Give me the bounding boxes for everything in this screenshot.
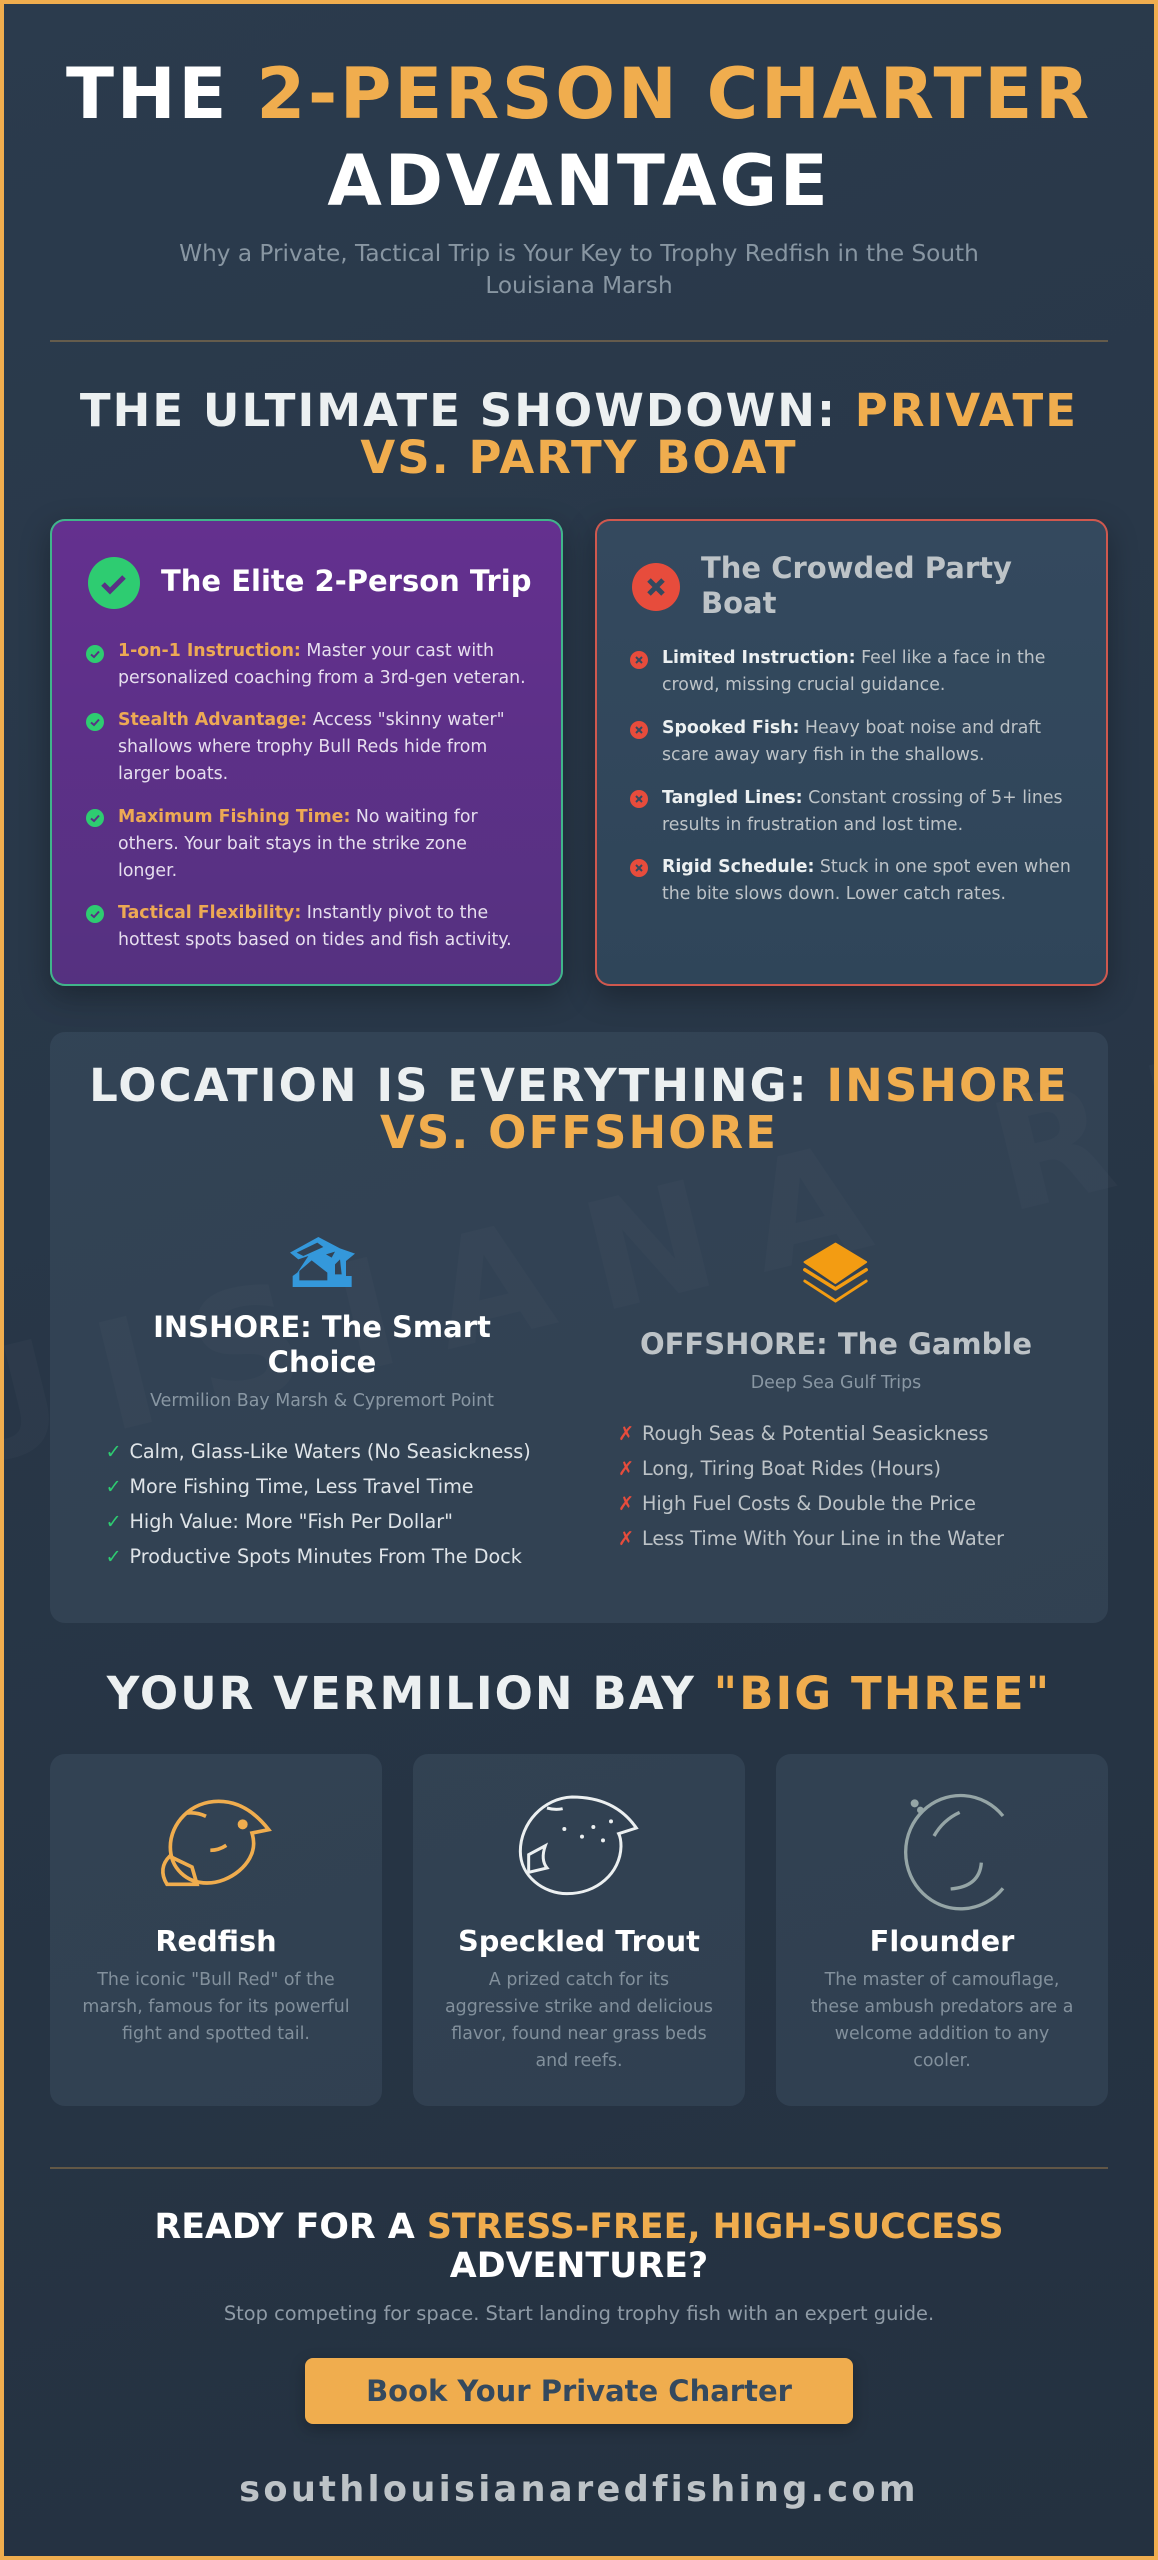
species description — [445, 1970, 713, 2071]
panel: location — [50, 1032, 1108, 1623]
list: inshore benefits: ✓ — [106, 1510, 122, 1533]
species description: cooler. — [913, 2051, 971, 2071]
heading: inshore: INSHORE: The Smart — [153, 1310, 491, 1344]
card: flounder — [776, 1754, 1108, 2106]
list: offshore drawbacks: Rough Seas & Potential Seasickness — [642, 1422, 989, 1445]
heading: location is everything: LOCATION IS EVERYTHING: INSHORE — [89, 1059, 1069, 1112]
list item: instruction — [86, 641, 526, 688]
species description: fight and spotted tail. — [122, 2024, 310, 2044]
list item: tangled lines — [630, 788, 1063, 835]
heading: location is everything: VS. OFFSHORE — [380, 1106, 778, 1159]
heading: ultimate showdown — [80, 384, 1078, 484]
list item: tangled lines: results in frustration and lost time. — [662, 815, 963, 835]
list item: limited instruction: Limited Instruction: Feel like a face in the — [662, 648, 1045, 668]
species description — [811, 1970, 1073, 2071]
species name: Speckled Trout — [458, 1924, 700, 1958]
list: offshore drawbacks: ✗ — [618, 1492, 634, 1515]
panel: elite 2-person trip — [50, 519, 563, 986]
button: book charter: Book Your Private Charter — [366, 2374, 792, 2408]
list: inshore benefits: ✓ — [106, 1440, 122, 1463]
heading: ultimate showdown: THE ULTIMATE SHOWDOWN: PRIVATE — [80, 384, 1078, 437]
list: offshore drawbacks: ✗ — [618, 1422, 634, 1445]
card: speckled trout — [413, 1754, 745, 2106]
list: offshore drawbacks: Less Time With Your Line in the Water — [642, 1527, 1004, 1550]
list item: flexibility — [86, 903, 512, 950]
species name: Redfish — [155, 1924, 277, 1958]
column: inshore — [106, 1237, 531, 1568]
list item: spooked fish: scare away wary fish in the shallows. — [662, 745, 984, 765]
heading: inshore: Choice — [268, 1345, 376, 1379]
subtitle — [179, 240, 979, 299]
species description: welcome addition to any — [835, 2024, 1049, 2044]
list item: limited instruction — [630, 648, 1045, 695]
species description: The master of camouflage, — [825, 1970, 1059, 1990]
list item: spooked fish — [630, 718, 1041, 765]
list item: stealth: Stealth Advantage: Access "skinny water" — [118, 710, 505, 730]
panel: crowded party boat — [595, 519, 1108, 986]
heading: location is everything — [89, 1059, 1069, 1159]
list: offshore drawbacks: ✗ — [618, 1457, 634, 1480]
species description: marsh, famous for its powerful — [82, 1997, 350, 2017]
species description — [82, 1970, 350, 2044]
title: THE 2-PERSON CHARTER — [66, 53, 1092, 135]
list item: fishing time: longer. — [118, 861, 177, 881]
list item: spooked fish: Spooked Fish: Heavy boat noise and draft — [662, 718, 1041, 738]
list item: fishing time: Maximum Fishing Time: No waiting for — [118, 807, 478, 827]
website url: southlouisianaredfishing.com — [239, 2469, 919, 2510]
subtitle: Louisiana Marsh — [485, 272, 673, 299]
list item: fishing time: others. Your bait stays in the strike zone — [118, 834, 467, 854]
list item: tangled lines: Tangled Lines: Constant crossing of 5+ lines — [662, 788, 1063, 808]
icon: large check — [88, 557, 140, 609]
icon: large x — [632, 563, 680, 611]
card title: The Elite 2-Person Trip — [161, 564, 531, 598]
list item: fishing time — [86, 807, 478, 881]
call to action heading — [154, 2207, 1004, 2286]
icon: offshore layers — [803, 1242, 868, 1303]
list item: instruction: 1-on-1 Instruction: Master your cast with — [118, 641, 494, 661]
list item: flexibility: Tactical Flexibility: Instantly pivot to the — [118, 903, 488, 923]
list item: stealth — [86, 710, 505, 784]
subtitle: offshore: Deep Sea Gulf Trips — [751, 1373, 921, 1393]
list: offshore drawbacks — [618, 1422, 1004, 1550]
list: offshore drawbacks: High Fuel Costs & Double the Price — [642, 1492, 976, 1515]
list: inshore benefits: Calm, Glass-Like Waters (No Seasickness) — [130, 1440, 531, 1463]
list: offshore drawbacks: ✗ — [618, 1527, 634, 1550]
list item: stealth: larger boats. — [118, 764, 228, 784]
species description: A prized catch for its — [489, 1970, 669, 1990]
button: book charter — [305, 2358, 853, 2424]
card title — [701, 551, 1012, 620]
call to action text: Stop competing for space. Start landing trophy fish with an expert guide. — [224, 2302, 934, 2325]
list: inshore benefits: ✓ — [106, 1545, 122, 1568]
call to action heading: ADVENTURE? — [450, 2246, 708, 2286]
list: inshore benefits: High Value: More "Fish Per Dollar" — [130, 1510, 453, 1533]
list item: rigid schedule: the bite slows down. Lower catch rates. — [662, 884, 1006, 904]
species description: The iconic "Bull Red" of the — [97, 1970, 335, 1990]
icon: flounder — [904, 1794, 1004, 1910]
species description: aggressive strike and delicious — [445, 1997, 713, 2017]
card title: Boat — [701, 586, 776, 620]
list: inshore benefits — [106, 1440, 531, 1568]
heading: big three: YOUR VERMILION BAY "BIG THREE" — [107, 1667, 1051, 1720]
species description: these ambush predators are a — [811, 1997, 1073, 2017]
list item: limited instruction: crowd, missing crucial guidance. — [662, 675, 945, 695]
list: inshore benefits: Productive Spots Minutes From The Dock — [130, 1545, 522, 1568]
species name: Flounder — [870, 1924, 1014, 1958]
column: offshore — [618, 1242, 1032, 1550]
heading: inshore — [153, 1310, 491, 1379]
list: inshore benefits: More Fishing Time, Less Travel Time — [130, 1475, 474, 1498]
icon: redfish — [161, 1800, 272, 1886]
species description: flavor, found near grass beds — [451, 2024, 707, 2044]
list item: stealth: shallows where trophy Bull Reds hide from — [118, 737, 487, 757]
icon: inshore house — [290, 1237, 355, 1287]
subtitle: Why a Private, Tactical Trip is Your Key to Trophy Redfish in the South — [179, 240, 979, 267]
card title: The Crowded Party — [701, 551, 1012, 585]
list item: instruction: personalized coaching from a 3rd-gen veteran. — [118, 668, 526, 688]
title: ADVANTAGE — [327, 140, 831, 222]
title — [66, 53, 1092, 222]
species description: and reefs. — [535, 2051, 623, 2071]
subtitle: inshore: Vermilion Bay Marsh & Cypremort Point — [150, 1391, 494, 1411]
heading: ultimate showdown: VS. PARTY BOAT — [360, 431, 798, 484]
heading: offshore: OFFSHORE: The Gamble — [640, 1327, 1032, 1361]
call to action heading: READY FOR A STRESS-FREE, HIGH-SUCCESS — [154, 2207, 1004, 2247]
list item: rigid schedule: Rigid Schedule: Stuck in one spot even when — [662, 857, 1071, 877]
icon: speckled trout — [518, 1796, 639, 1896]
list: inshore benefits: ✓ — [106, 1475, 122, 1498]
list item: flexibility: hottest spots based on tides and fish activity. — [118, 930, 512, 950]
list item: rigid schedule — [630, 857, 1071, 904]
card: redfish — [50, 1754, 382, 2106]
list: offshore drawbacks: Long, Tiring Boat Rides (Hours) — [642, 1457, 941, 1480]
